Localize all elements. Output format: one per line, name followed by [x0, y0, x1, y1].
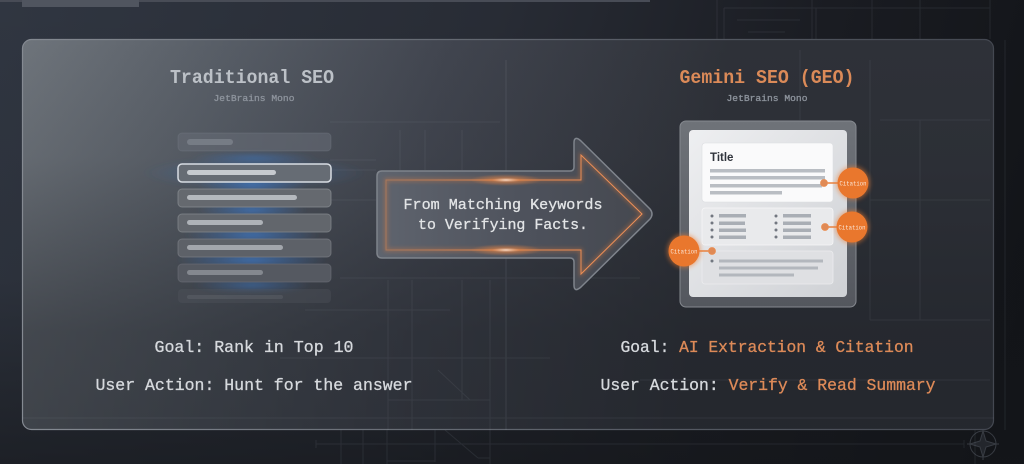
arrow text: From Matching Keywords: [404, 197, 602, 214]
citation badge: middle: Citation: [838, 224, 866, 232]
text: user action: User Action: Hunt for the answer: [96, 376, 412, 395]
arrow orange outline: [386, 155, 642, 274]
left column: Traditional SEO: [96, 67, 412, 395]
center arrow: [377, 138, 652, 290]
card: bullet list section: [702, 208, 833, 245]
document sheet: [689, 130, 847, 297]
subheading: font label: JetBrains Mono: [726, 93, 808, 104]
heading: Traditional SEO: Traditional SEO: [170, 67, 334, 89]
result row 5: [178, 239, 331, 257]
card: title section: [702, 143, 833, 202]
citation badge: left: Citation: [670, 248, 698, 256]
document glass frame: [680, 121, 856, 307]
top ruler bar: [0, 0, 650, 7]
subheading: font label: JetBrains Mono: [214, 93, 295, 104]
arrow body: [377, 138, 652, 290]
blueprint lines inside panel: [22, 50, 994, 430]
citation badge: middle: [822, 210, 869, 244]
arrow sparks: [470, 174, 542, 256]
center arrow: to Verifying Facts.: [418, 217, 588, 234]
citation badge: top: Citation: [840, 180, 866, 188]
result row 6: [178, 264, 331, 282]
result row 4: [178, 214, 331, 232]
text: goal: Goal: Rank in Top 10: [154, 338, 354, 357]
citation badge: top: [820, 166, 870, 200]
heading: Gemini SEO (GEO): Gemini SEO (GEO): [680, 67, 854, 89]
main glass panel: [22, 40, 994, 430]
right column: Gemini SEO: [600, 67, 936, 395]
arrow orange glow outline: [386, 155, 642, 274]
blue glow behind results: [142, 151, 366, 294]
card: title section: Title: [710, 152, 733, 164]
icon: compass rose: [967, 428, 999, 460]
search result list: [178, 133, 331, 303]
citation badge: left: [667, 234, 716, 268]
blueprint background lines: [316, 0, 1005, 464]
text: goal: Goal: AI Extraction & Citation: [620, 338, 914, 357]
document mockup: [680, 121, 856, 307]
card: summary section: [702, 251, 833, 284]
result row 3: [178, 189, 331, 207]
result row 7 (fading out): [178, 289, 331, 303]
result row 1 (faded): [178, 133, 331, 151]
result row 2 (highlighted): [178, 164, 331, 182]
text: user action: User Action: Verify & Read Summary: [600, 376, 936, 395]
